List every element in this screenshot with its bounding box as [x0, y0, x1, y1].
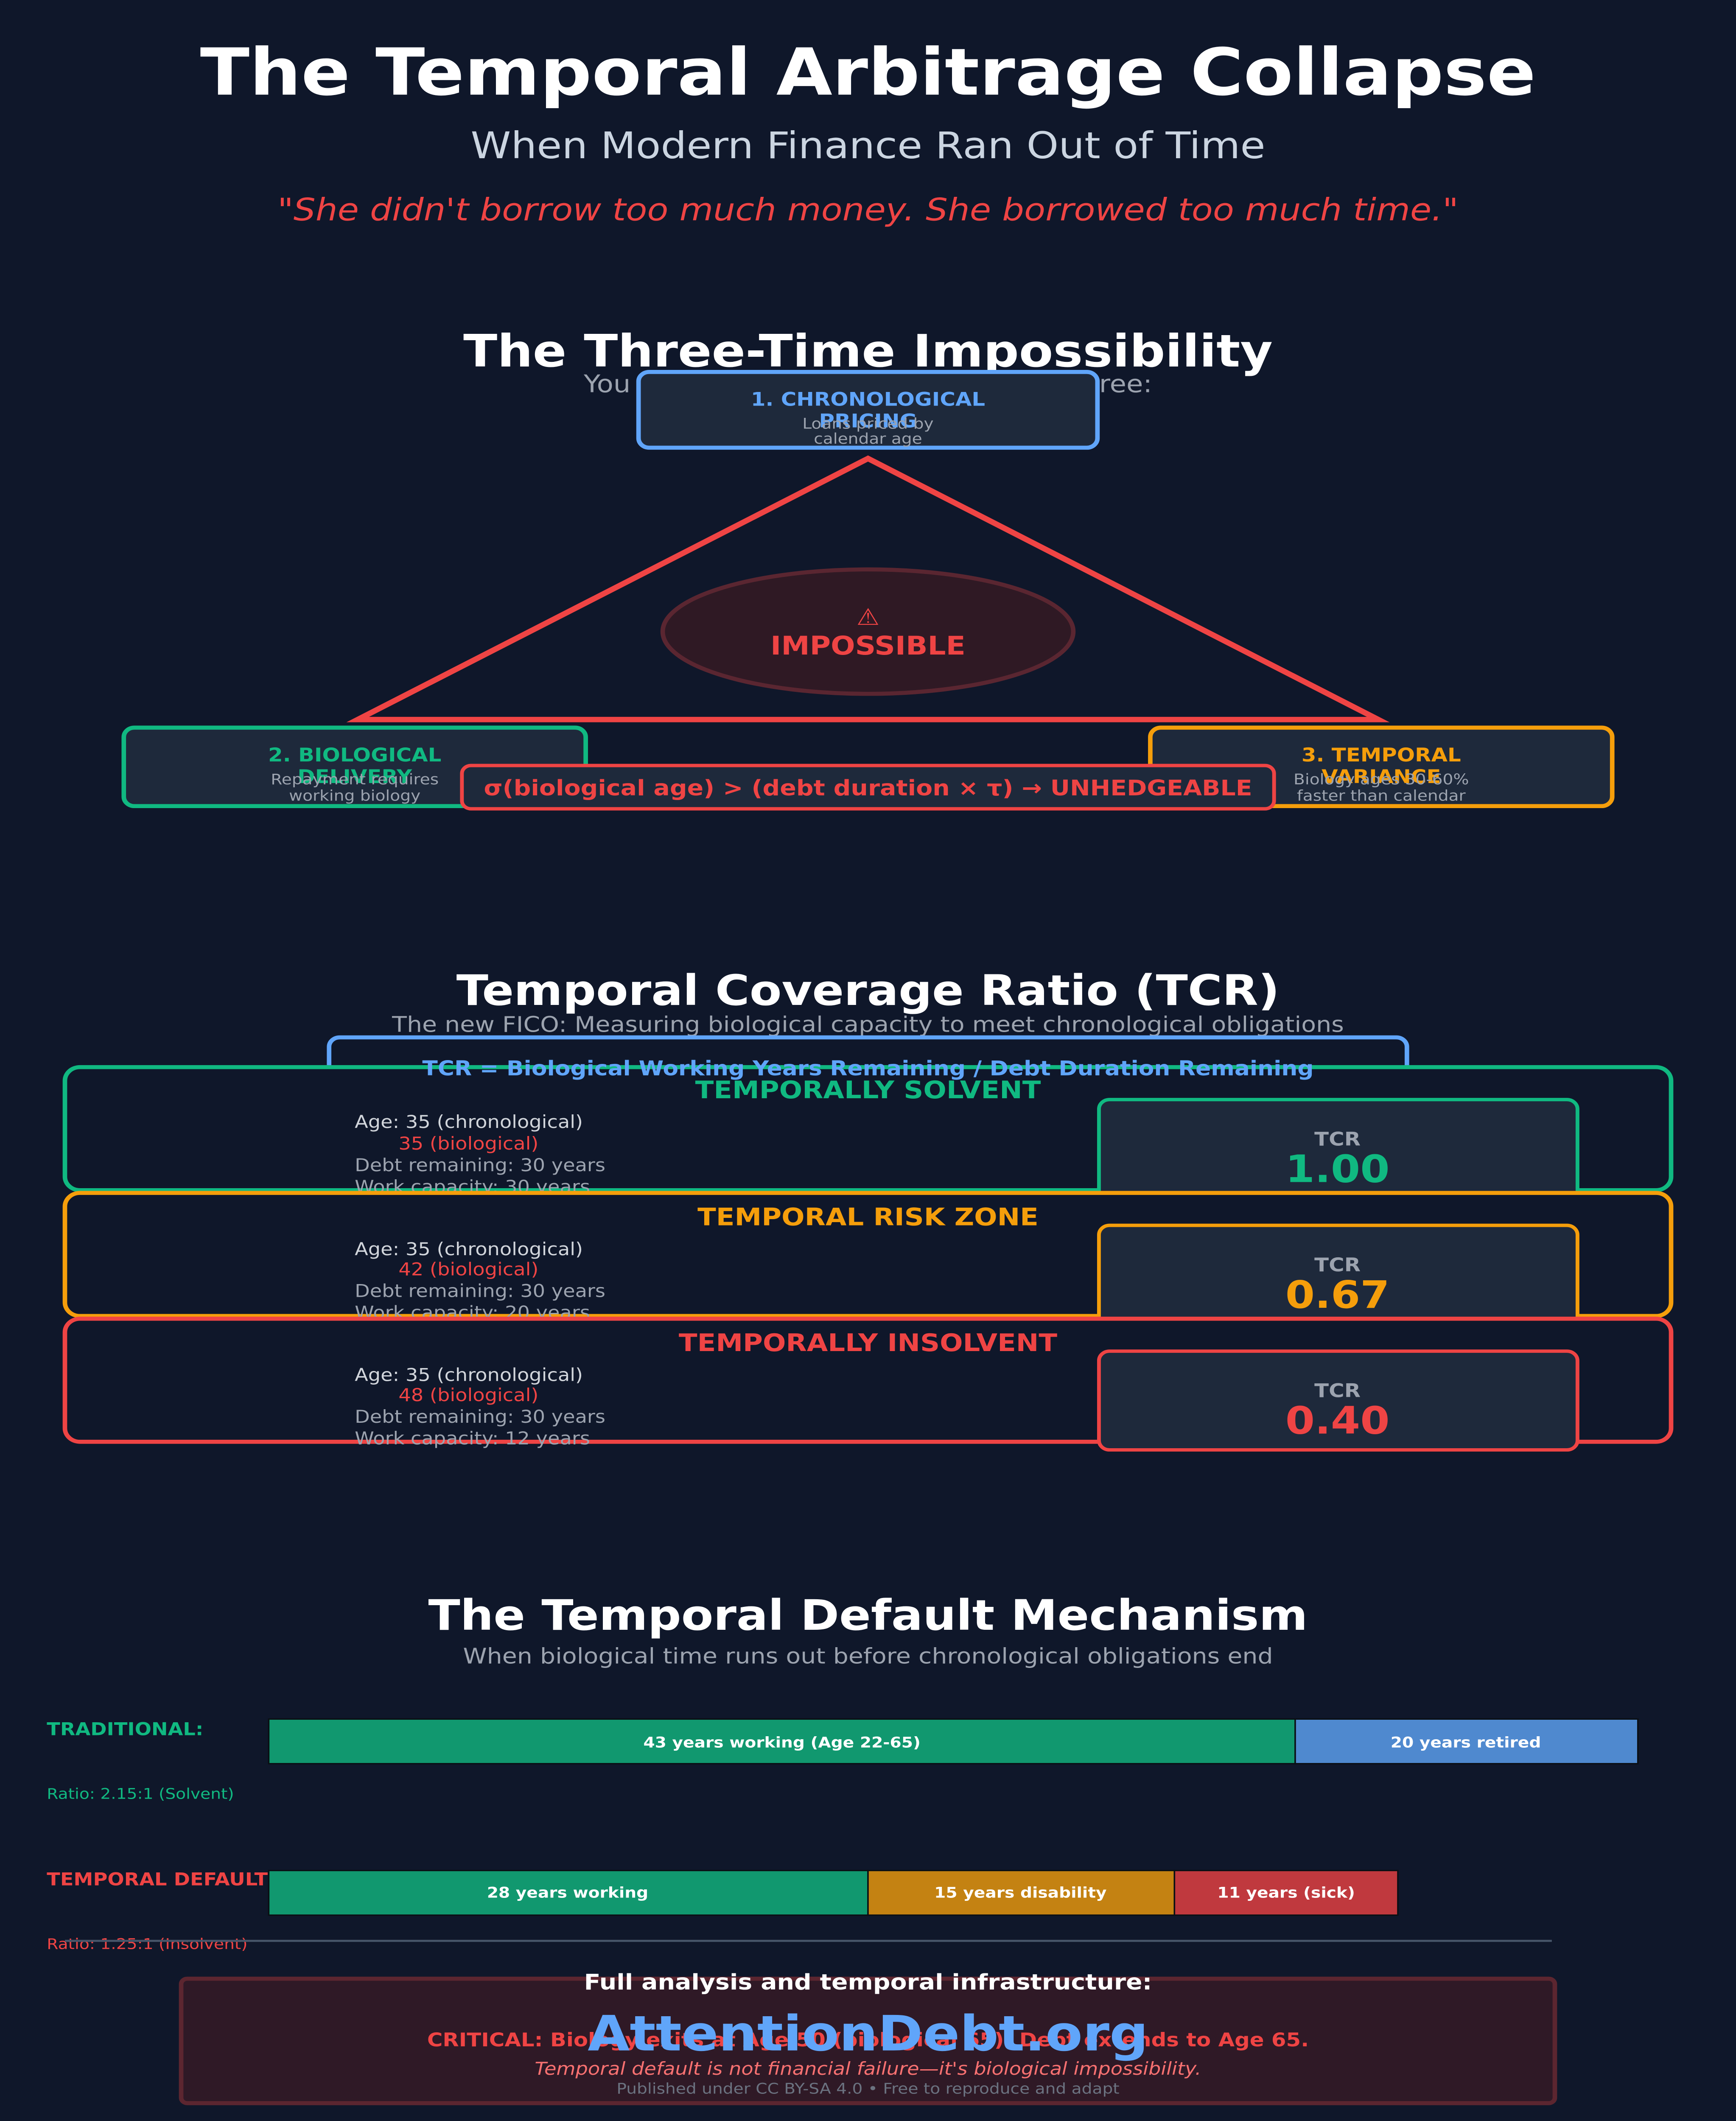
box: biological delivery	[124, 728, 586, 806]
formula box	[462, 766, 1274, 809]
impossible ellipse: ⚠	[857, 604, 879, 630]
panel: risk zone: Debt remaining: 30 years	[355, 1281, 605, 1301]
footer callout: CRITICAL: Biology exits at Age 50 (biological 65). Debt extends to Age 65.	[427, 2029, 1309, 2051]
impossible ellipse	[663, 569, 1073, 694]
box: chronological pricing: calendar age	[814, 430, 922, 447]
formula box: σ(biological age) > (debt duration × τ) → UNHEDGEABLE	[484, 775, 1252, 800]
panel: insolvent: Age: 35 (chronological)	[355, 1365, 583, 1385]
bar: temporal default: 15 years disability	[934, 1884, 1107, 1901]
box: chronological pricing: 1. CHRONOLOGICAL	[751, 389, 985, 411]
triangle	[358, 459, 1378, 719]
box: temporal variance: faster than calendar	[1297, 787, 1466, 804]
subheading: When biological time runs out before chronological obligations end	[463, 1644, 1273, 1669]
panel: insolvent: TCR	[1314, 1380, 1361, 1402]
bar: temporal default: 28 years working	[487, 1884, 648, 1901]
box: temporal variance: 3. TEMPORAL	[1302, 744, 1461, 766]
ratio traditional: Ratio: 2.15:1 (Solvent)	[47, 1785, 234, 1802]
footer callout: Temporal default is not financial failure—it's biological impossibility.	[535, 2059, 1201, 2079]
panel: insolvent: 48 (biological)	[398, 1385, 538, 1406]
panel: insolvent	[65, 1319, 1671, 1450]
formula box	[329, 1037, 1407, 1091]
subheading: The new FICO: Measuring biological capacity to meet chronological obligations	[392, 1012, 1344, 1037]
panel: risk zone: 42 (biological)	[398, 1259, 538, 1280]
footer callout: AttentionDebt.org	[588, 2005, 1148, 2062]
box: biological delivery: 2. BIOLOGICAL	[268, 744, 441, 766]
bar: temporal default: 11 years (sick)	[1217, 1884, 1355, 1901]
heading: Temporal Coverage Ratio (TCR)	[456, 966, 1280, 1015]
box: biological delivery: working biology	[289, 787, 420, 804]
panel: risk zone: 0.67	[1285, 1273, 1390, 1317]
panel: insolvent: 0.40	[1285, 1399, 1390, 1443]
panel: solvent: 35 (biological)	[398, 1133, 538, 1154]
ratio default: Ratio: 1.25:1 (Insolvent)	[47, 1935, 248, 1953]
panel: risk zone: TCR	[1314, 1254, 1361, 1276]
bar: traditional: 43 years working (Age 22-65)	[643, 1734, 921, 1751]
panel: insolvent: TEMPORALLY INSOLVENT	[679, 1329, 1058, 1357]
section: default mechanism	[47, 1591, 1638, 1953]
box: biological delivery: DELIVERY	[297, 766, 412, 788]
panel: solvent: TEMPORALLY SOLVENT	[695, 1076, 1041, 1104]
impossible ellipse: IMPOSSIBLE	[770, 631, 966, 661]
bar: traditional: 20 years retired	[1391, 1734, 1541, 1751]
heading: The Three-Time Impossibility	[463, 326, 1273, 378]
panel: insolvent: Work capacity: 12 years	[355, 1428, 590, 1449]
panel: risk zone	[65, 1193, 1671, 1334]
box: chronological pricing: Loans priced by	[802, 415, 934, 432]
panel: solvent: TCR	[1314, 1128, 1361, 1150]
panel: solvent	[65, 1067, 1671, 1208]
subtitle: When Modern Finance Ran Out of Time	[470, 124, 1266, 167]
panel: risk zone: Work capacity: 20 years	[355, 1303, 590, 1323]
bar: traditional	[269, 1719, 1638, 1764]
panel: solvent: Debt remaining: 30 years	[355, 1155, 605, 1176]
footer callout: Full analysis and temporal infrastructure:	[584, 1970, 1152, 1995]
bar: temporal default	[269, 1871, 1398, 1915]
formula text: TCR = Biological Working Years Remaining / Debt Duration Remaining	[422, 1056, 1314, 1080]
label: temporal default: TEMPORAL DEFAULT:	[47, 1869, 274, 1890]
box: temporal variance: VARIANCE	[1322, 766, 1441, 788]
title: The Temporal Arbitrage Collapse	[200, 35, 1536, 110]
panel: risk zone: TEMPORAL RISK ZONE	[697, 1203, 1039, 1231]
footer callout: Published under CC BY-SA 4.0 • Free to reproduce and adapt	[616, 2080, 1120, 2097]
panel: risk zone: Age: 35 (chronological)	[355, 1239, 583, 1259]
label: traditional: TRADITIONAL:	[47, 1719, 203, 1740]
box: biological delivery: Repayment requires	[271, 771, 439, 788]
panel: solvent: Age: 35 (chronological)	[355, 1112, 583, 1132]
box: temporal variance	[1150, 728, 1612, 806]
heading: The Temporal Default Mechanism	[428, 1591, 1308, 1640]
box: chronological pricing: PRICING	[819, 410, 917, 432]
box: chronological pricing	[638, 372, 1098, 448]
box: temporal variance: Biology ages 30-60%	[1294, 771, 1469, 788]
subheading: You cannot simultaneously have all three:	[583, 370, 1152, 398]
panel: solvent: 1.00	[1285, 1147, 1390, 1191]
quote: "She didn't borrow too much money. She borrowed too much time."	[277, 192, 1459, 228]
section: three-time impossibility	[124, 326, 1612, 809]
footer callout	[181, 1970, 1555, 2103]
panel: insolvent: Debt remaining: 30 years	[355, 1407, 605, 1427]
section: TCR	[65, 966, 1671, 1450]
panel: solvent: Work capacity: 30 years	[355, 1177, 590, 1198]
